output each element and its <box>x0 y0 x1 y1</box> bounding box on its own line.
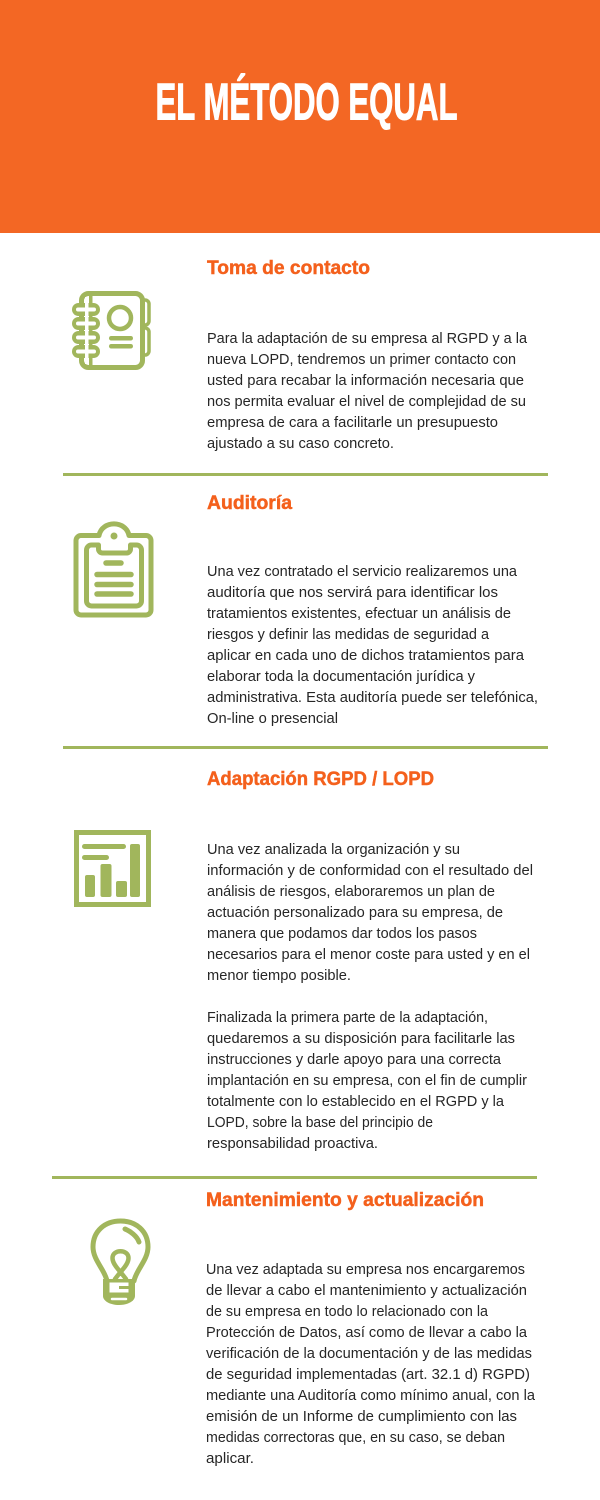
body text: adaptación, párrafo 1 <box>207 842 533 984</box>
panel: toma de contacto <box>72 258 528 452</box>
body text: adaptación, párrafo 1: Una vez analizada la organización y su <box>207 842 460 858</box>
heading: mantenimiento y actualización: Mantenimiento y actualización <box>206 1190 484 1211</box>
body text: toma de contacto: empresa de cara a facilitarle un presupuesto <box>207 415 498 431</box>
icon: bar chart <box>76 832 148 904</box>
body text: mantenimiento: emisión de un Informe de cumplimiento con las <box>206 1409 517 1425</box>
body text: auditoría: aplicar en cada uno de dichos tratamientos para <box>207 648 525 664</box>
body text: adaptación, párrafo 1: actuación personalizado para su empresa, de <box>207 905 503 921</box>
icon: clipboard <box>76 524 151 615</box>
header banner <box>0 0 600 233</box>
body text: adaptación, párrafo 2: instrucciones y darle apoyo para una correcta <box>207 1052 502 1068</box>
heading: auditoría: Auditoría <box>207 493 292 514</box>
body text: adaptación, párrafo 2: LOPD, sobre la base del principio de <box>207 1115 433 1131</box>
body text: adaptación, párrafo 2: responsabilidad proactiva. <box>207 1136 378 1152</box>
body text: auditoría: tratamientos existentes, efectuar un análisis de <box>207 606 511 622</box>
heading: adaptación RGPD / LOPD: Adaptación RGPD / LOPD <box>207 769 434 790</box>
body text: mantenimiento: aplicar. <box>206 1451 254 1467</box>
body text: mantenimiento: mediante una Auditoría como mínimo anual, con la <box>206 1388 536 1404</box>
icon: address book <box>72 293 149 368</box>
body text: mantenimiento: de seguridad implementadas (art. 32.1 d) RGPD) <box>206 1367 530 1383</box>
body text: adaptación, párrafo 2: quedaremos a su disposición para facilitarle las <box>207 1031 515 1047</box>
body text: auditoría <box>207 564 538 727</box>
body text: toma de contacto: nueva LOPD, tendremos un primer contacto con <box>207 352 516 368</box>
body text: adaptación, párrafo 1: necesarios para el menor coste para usted y en el <box>207 947 530 963</box>
panel: adaptación RGPD / LOPD <box>76 769 533 1152</box>
body text: toma de contacto: Para la adaptación de su empresa al RGPD y a la <box>207 331 528 347</box>
panel: mantenimiento y actualización <box>93 1190 536 1467</box>
body text: toma de contacto <box>207 331 528 452</box>
body text: auditoría: On-line o presencial <box>207 711 338 727</box>
icon: light bulb <box>93 1221 148 1305</box>
body text: auditoría: administrativa. Esta auditoría puede ser telefónica, <box>207 690 538 706</box>
body text: toma de contacto: ajustado a su caso concreto. <box>207 436 394 452</box>
body text: auditoría: riesgos y definir las medidas de seguridad a <box>207 627 490 643</box>
body text: mantenimiento <box>206 1262 536 1467</box>
body text: mantenimiento: de llevar a cabo el mantenimiento y actualización <box>206 1283 527 1299</box>
body text: mantenimiento: de su empresa en todo lo relacionado con la <box>206 1304 489 1320</box>
body text: mantenimiento: Protección de Datos, así como de llevar a cabo la <box>206 1325 528 1341</box>
body text: toma de contacto: usted para recabar la información necesaria que <box>207 373 524 389</box>
body text: toma de contacto: nos permita evaluar el nivel de complejidad de su <box>207 394 526 410</box>
body text: mantenimiento: Una vez adaptada su empresa nos encargaremos <box>206 1262 525 1278</box>
body text: adaptación, párrafo 2: totalmente con lo establecido en el RGPD y la <box>207 1094 505 1110</box>
body text: adaptación, párrafo 1: análisis de riesgos, elaboraremos un plan de <box>207 884 495 900</box>
panel: auditoría <box>76 493 538 727</box>
body text: auditoría: Una vez contratado el servicio realizaremos una <box>207 564 518 580</box>
body text: auditoría: elaborar toda la documentación jurídica y <box>207 669 476 685</box>
body text: adaptación, párrafo 1: información y de conformidad con el resultado del <box>207 863 533 879</box>
body text: auditoría: auditoría que nos servirá para identificar los <box>207 585 498 601</box>
heading: toma de contacto: Toma de contacto <box>207 258 370 279</box>
body text: mantenimiento: medidas correctoras que, en su caso, se deban <box>206 1430 505 1446</box>
body text: adaptación, párrafo 2 <box>207 1010 527 1152</box>
body text: mantenimiento: verificación de la documentación y de las medidas <box>206 1346 532 1362</box>
body text: adaptación, párrafo 2: Finalizada la primera parte de la adaptación, <box>207 1010 488 1026</box>
body text: adaptación, párrafo 2: implantación en su empresa, con el fin de cumplir <box>207 1073 527 1089</box>
body text: adaptación, párrafo 1: manera que podamos dar todos los pasos <box>207 926 477 942</box>
body text: adaptación, párrafo 1: menor tiempo posible. <box>207 968 351 984</box>
